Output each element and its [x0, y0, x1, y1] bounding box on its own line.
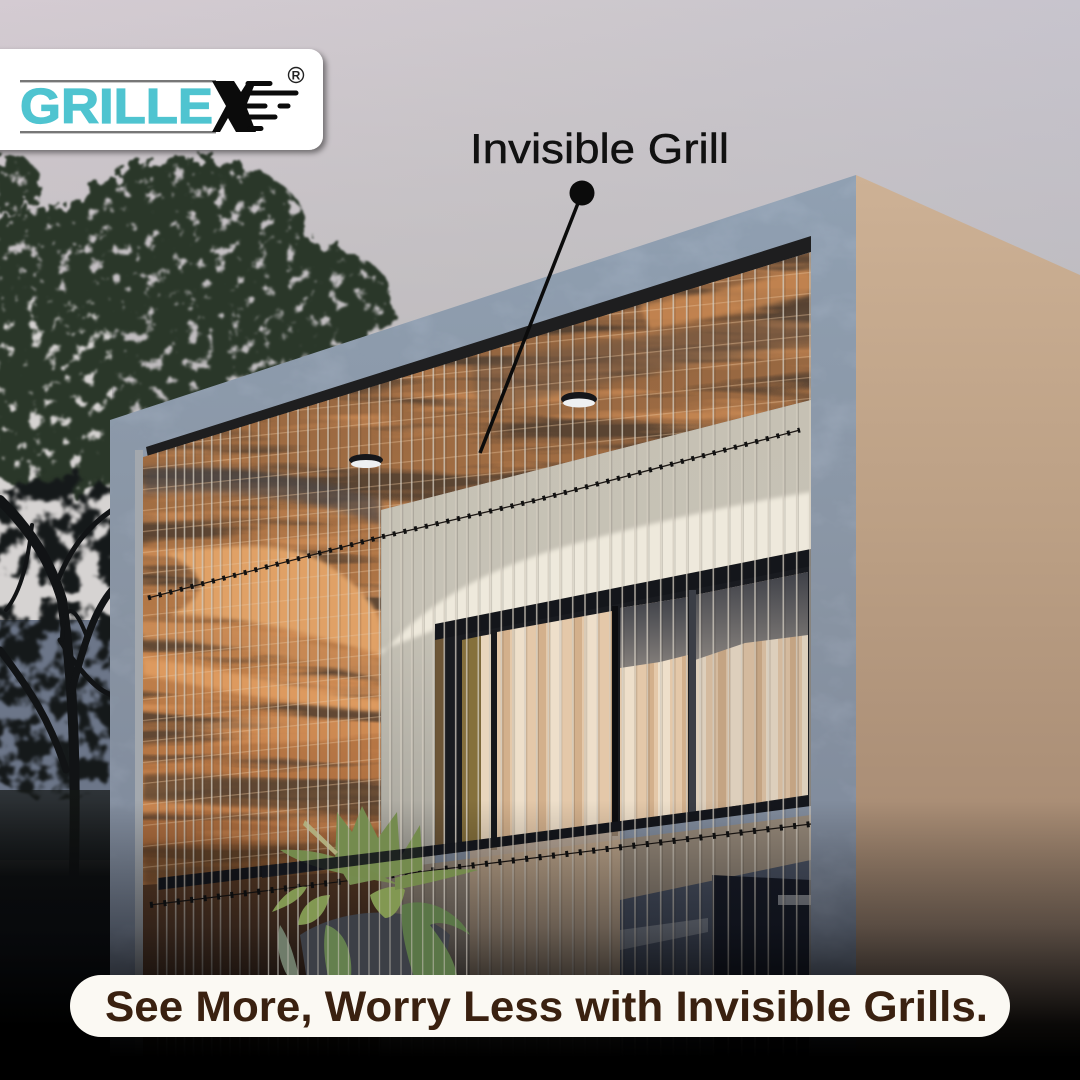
rods over plant [268, 800, 467, 980]
ceiling light left [349, 454, 383, 468]
plant [262, 806, 478, 1000]
grill rods [156, 252, 811, 975]
wood wall and ceiling [143, 240, 811, 900]
logo wordmark: GRILLE [20, 80, 213, 134]
pointer dot [570, 180, 594, 206]
tree [0, 155, 392, 1080]
ceiling light right [561, 392, 597, 408]
registered mark [288, 68, 304, 82]
lower cross wire [150, 824, 811, 905]
bottom dark fade [0, 800, 1080, 1080]
lower room [381, 815, 811, 975]
tagline pill: See More, Worry Less with Invisible Grills. [105, 983, 988, 1031]
logo card [0, 49, 323, 150]
logo X with speed lines [212, 81, 296, 132]
logo rules [20, 80, 216, 133]
distant building behind tree [0, 620, 112, 860]
window [435, 549, 811, 852]
grill rods shadow [158, 256, 799, 970]
side wall of building [856, 175, 1080, 1080]
upper cross wire [148, 430, 800, 598]
registered mark: R [292, 68, 301, 82]
concrete frame [110, 175, 856, 975]
wall light arc [381, 492, 811, 655]
label: Invisible Grill: Invisible Grill [470, 125, 729, 172]
pointer line [480, 193, 582, 453]
dark soffit strip [146, 236, 811, 458]
balcony rail [158, 796, 811, 890]
opening interior [143, 252, 811, 975]
white wall [381, 400, 811, 880]
